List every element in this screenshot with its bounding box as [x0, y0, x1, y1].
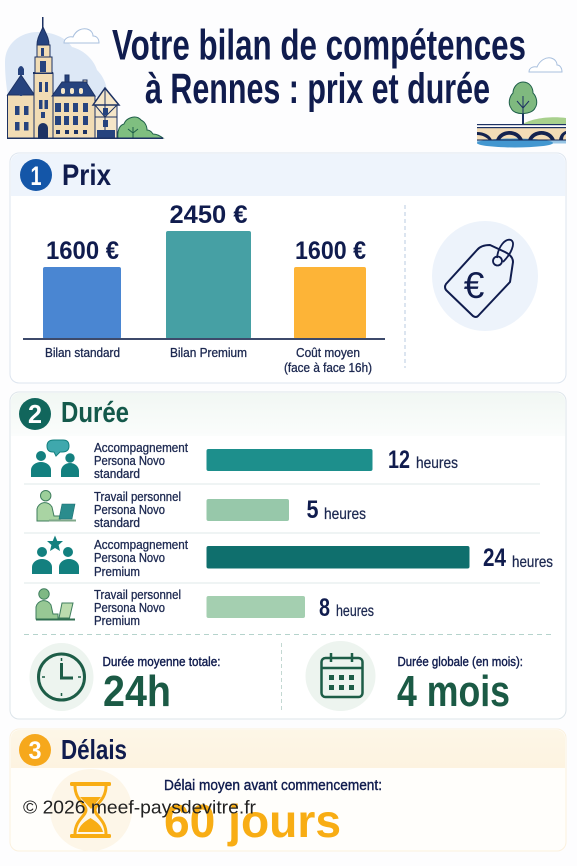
header illustration: Rennes buildings [5, 17, 163, 139]
text: délai moyen: Délai moyen avant commencement: [164, 777, 382, 794]
icon: clock [30, 643, 94, 711]
title [112, 22, 526, 113]
row: accompagnement premium [32, 536, 553, 579]
row: accompagnement premium: Accompagnement [94, 538, 188, 552]
stat: durée globale: Durée globale (en mois): [398, 654, 523, 669]
icon: price tag [432, 221, 538, 331]
row: travail personnel premium [36, 588, 374, 628]
panel: prix [10, 153, 566, 383]
row: accompagnement premium: Premium [94, 565, 140, 579]
row: travail personnel premium: 8 [319, 594, 330, 622]
copyright watermark: © 2026 meef-paysdevitre.fr [23, 798, 256, 818]
stat: durée moyenne totale: Durée moyenne totale: [102, 654, 220, 669]
row: accompagnement premium: Persona Novo [94, 551, 165, 565]
bar chart: prix: Bilan standard [45, 346, 120, 360]
icon: person at laptop [36, 589, 75, 620]
text: délai moyen [164, 777, 382, 847]
stat: durée globale: 4 mois [397, 667, 510, 716]
row: travail personnel standard: 5 [306, 496, 319, 524]
panel: durée [10, 392, 566, 719]
row: travail personnel premium: Persona Novo [94, 601, 165, 615]
row: accompagnement standard: 12 [388, 446, 410, 474]
icon: hourglass [50, 769, 132, 851]
heading: prix: Prix [62, 159, 111, 192]
row: travail personnel standard: Persona Novo [94, 503, 165, 517]
heading: prix [20, 159, 111, 192]
bar chart: prix: 1600 € [295, 237, 366, 265]
panel: délais [10, 729, 566, 851]
row: accompagnement standard: Persona Novo [94, 454, 165, 468]
icon: two people and star [32, 536, 79, 574]
bar chart: prix: Bilan Premium [170, 346, 247, 360]
row: travail personnel standard: Travail personnel [94, 490, 181, 504]
bar chart: prix [23, 201, 385, 375]
icon: person at laptop [37, 490, 76, 522]
heading: délais: Délais [61, 734, 127, 765]
row: travail personnel premium: Premium [94, 614, 140, 628]
bar chart: prix: 2450 € [170, 201, 248, 229]
row: travail personnel premium: heures [336, 603, 374, 620]
row: travail personnel standard [37, 490, 366, 530]
heading: durée [19, 397, 129, 430]
row: accompagnement standard [31, 440, 458, 481]
row: travail personnel standard: standard [94, 516, 140, 530]
text: délai moyen: 60 jours [164, 795, 341, 847]
heading: prix: 1 [30, 161, 42, 191]
bar chart: prix: (face à face 16h) [284, 361, 372, 375]
bar chart: prix: 1600 € [46, 237, 119, 265]
heading: durée: Durée [61, 397, 129, 429]
icon: calendar [306, 641, 376, 711]
heading: durée: 2 [28, 399, 42, 429]
stat: durée moyenne totale: 24h [103, 667, 171, 716]
stat: durée globale [306, 641, 523, 716]
row: accompagnement premium: 24 [483, 544, 506, 572]
header illustration: bridge and tree [477, 58, 566, 148]
row: accompagnement standard: heures [416, 455, 458, 472]
icon: two people talking [31, 440, 79, 477]
heading: délais [19, 734, 127, 766]
row: travail personnel premium: Travail personnel [94, 588, 181, 602]
bar chart: prix: Coût moyen [296, 346, 360, 360]
icon: price tag: € [464, 265, 485, 306]
row: travail personnel standard: heures [324, 506, 366, 523]
row: accompagnement standard: Accompagnement [94, 441, 188, 455]
stat: durée moyenne totale [30, 643, 220, 716]
row: accompagnement standard: standard [94, 467, 140, 481]
heading: délais: 3 [28, 737, 42, 765]
row: accompagnement premium: heures [512, 554, 553, 571]
